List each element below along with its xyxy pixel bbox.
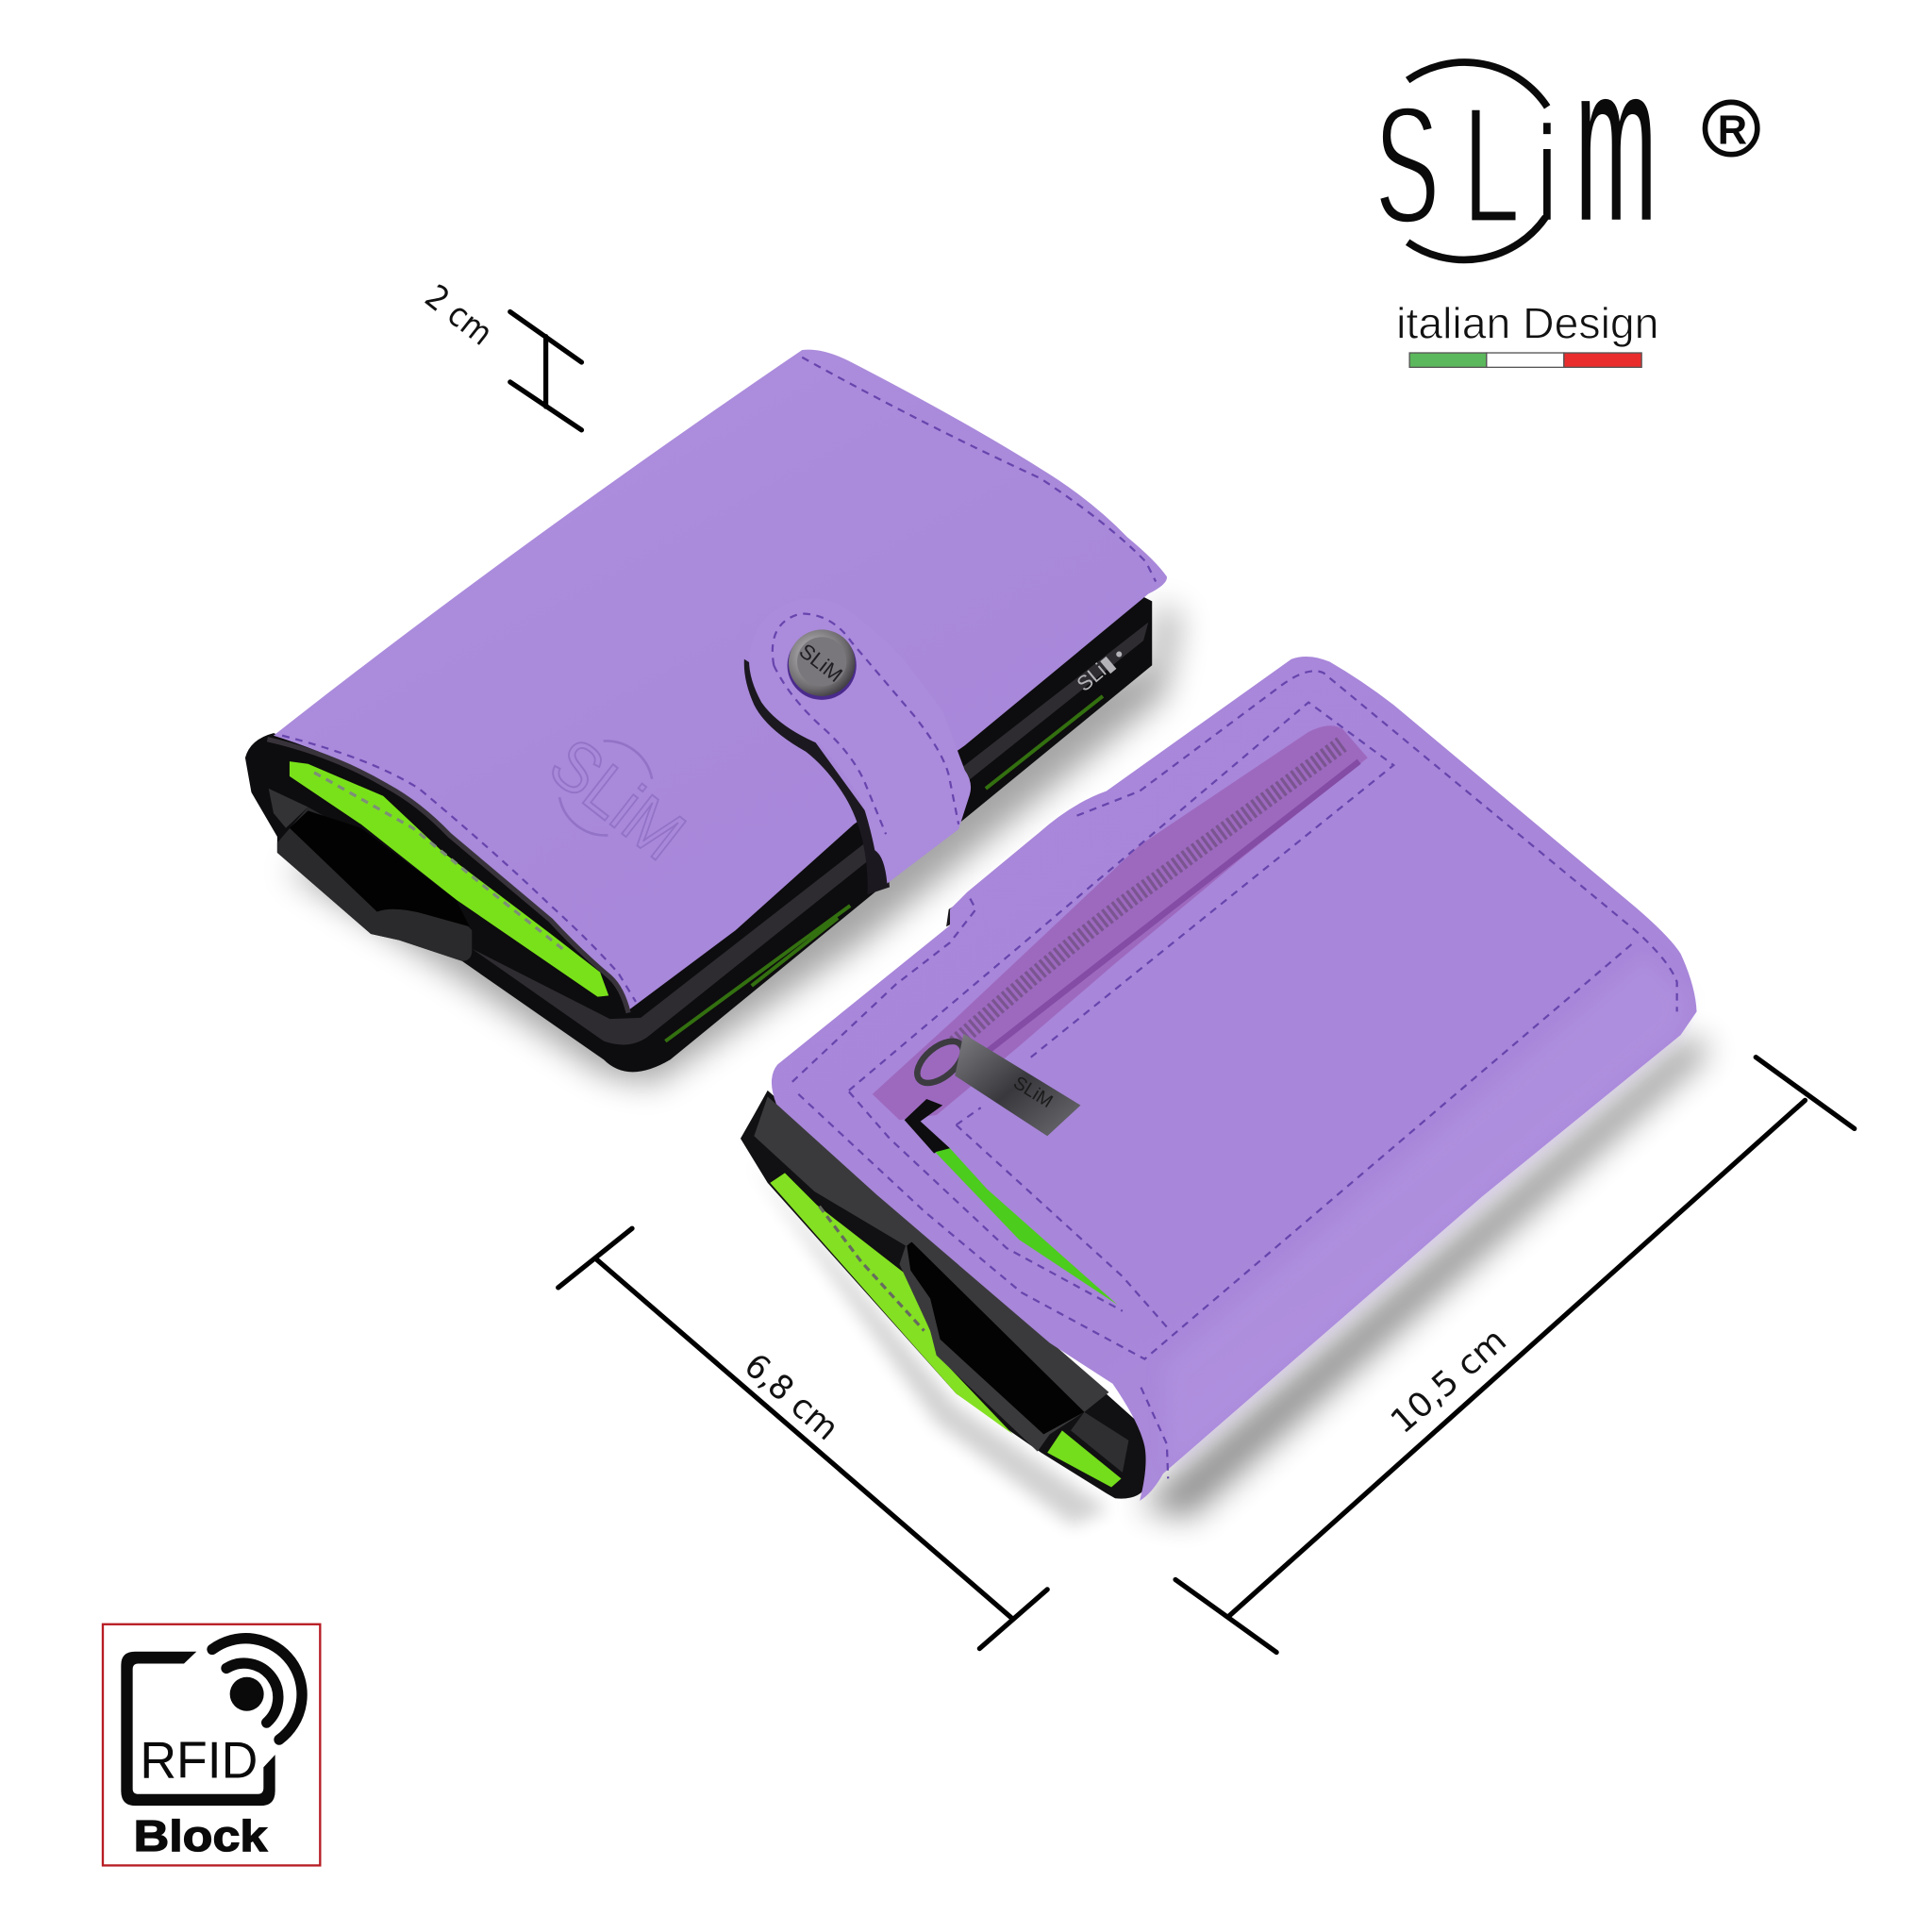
tagline: italian Design: [1396, 298, 1658, 347]
wallet one: snap closure front view: [245, 350, 1180, 1084]
wallet one cover edge: [267, 740, 628, 1013]
zipper opening: [873, 725, 1368, 1120]
wallet two interior right: [1071, 1412, 1128, 1473]
logo wordmark: S: [1374, 68, 1441, 264]
zipper dark lower tape: [961, 761, 1359, 1072]
wallet one cover stitching: [282, 358, 1156, 1002]
logo wordmark: L: [1462, 66, 1522, 263]
card outline icon: [121, 1652, 275, 1806]
wallet one metal case: [245, 579, 1152, 1072]
registered mark: [1705, 102, 1757, 155]
pocket green card: [935, 1148, 1118, 1305]
RFID block badge: [103, 1624, 320, 1865]
wallet one interior grey: [269, 789, 308, 828]
wallet one green lining: [290, 761, 608, 997]
logo letter i: i: [1538, 99, 1557, 248]
wallet two fold highlight: [1164, 955, 1688, 1466]
wallet one green stitches: [314, 773, 566, 951]
zipper pull: SLiM: [1009, 1073, 1057, 1112]
brand logo: [1374, 17, 1757, 367]
wallet one pull tab: [277, 808, 472, 961]
label 2 cm: 2 cm: [418, 277, 500, 354]
wallet one side band: [472, 623, 1148, 1044]
dimension: 10,5 cm length: [1175, 1058, 1855, 1653]
registered mark: R: [1718, 108, 1747, 153]
logo wordmark: [1374, 66, 1522, 264]
wallet two metal top band: [754, 1096, 1109, 1412]
strap: [749, 598, 971, 883]
Block text: Block: [134, 1811, 267, 1860]
snap button: SLiM: [795, 639, 847, 687]
wallet two notch case hint: [946, 903, 958, 926]
wallet one shadow: [286, 604, 1180, 1084]
strap shadow edge: [744, 659, 890, 894]
dimension: 6,8 cm width: [558, 1228, 1047, 1649]
logo circle arcs: [1407, 62, 1547, 259]
wallet two stitching: [792, 671, 1677, 1478]
wallet one green card edge on side: [665, 696, 1103, 1041]
RFID text: RFID: [140, 1730, 258, 1789]
wallet one purple cover: [274, 350, 1167, 1010]
zipper teeth: [955, 744, 1341, 1043]
badge red frame: [103, 1624, 320, 1865]
logo letter m: m: [1574, 17, 1657, 267]
wallet two tab surround: [899, 1242, 1084, 1452]
wallet two shadow: [1140, 1038, 1710, 1518]
wallet two metal case: [741, 1091, 1147, 1499]
wallet two lower green: [1047, 1430, 1122, 1487]
zipper pull: [909, 1033, 1080, 1136]
wallet two: zip pocket back view: [741, 657, 1710, 1525]
snap button: [788, 629, 857, 700]
label 10,5 cm: 10,5 cm: [1384, 1321, 1514, 1441]
wallet two purple cover: [772, 657, 1697, 1501]
wallet two pull tab pocket: [907, 1242, 1084, 1434]
italian flag bar: [1409, 353, 1641, 367]
pocket black slit: [905, 1099, 950, 1154]
wallet two green lining: [770, 1173, 1013, 1434]
wallet one embossed logo: SLiM: [535, 723, 699, 875]
signal waves icon: [212, 1639, 302, 1740]
dimension: 2 cm height: [418, 277, 581, 430]
wallet one case logo: SLi▮ •: [1073, 642, 1129, 696]
wallet two green stitches: [820, 1207, 924, 1331]
strap stitching: [773, 613, 958, 834]
label 6,8 cm: 6,8 cm: [737, 1346, 846, 1448]
wallet two lower-left shadow: [748, 1158, 1109, 1525]
